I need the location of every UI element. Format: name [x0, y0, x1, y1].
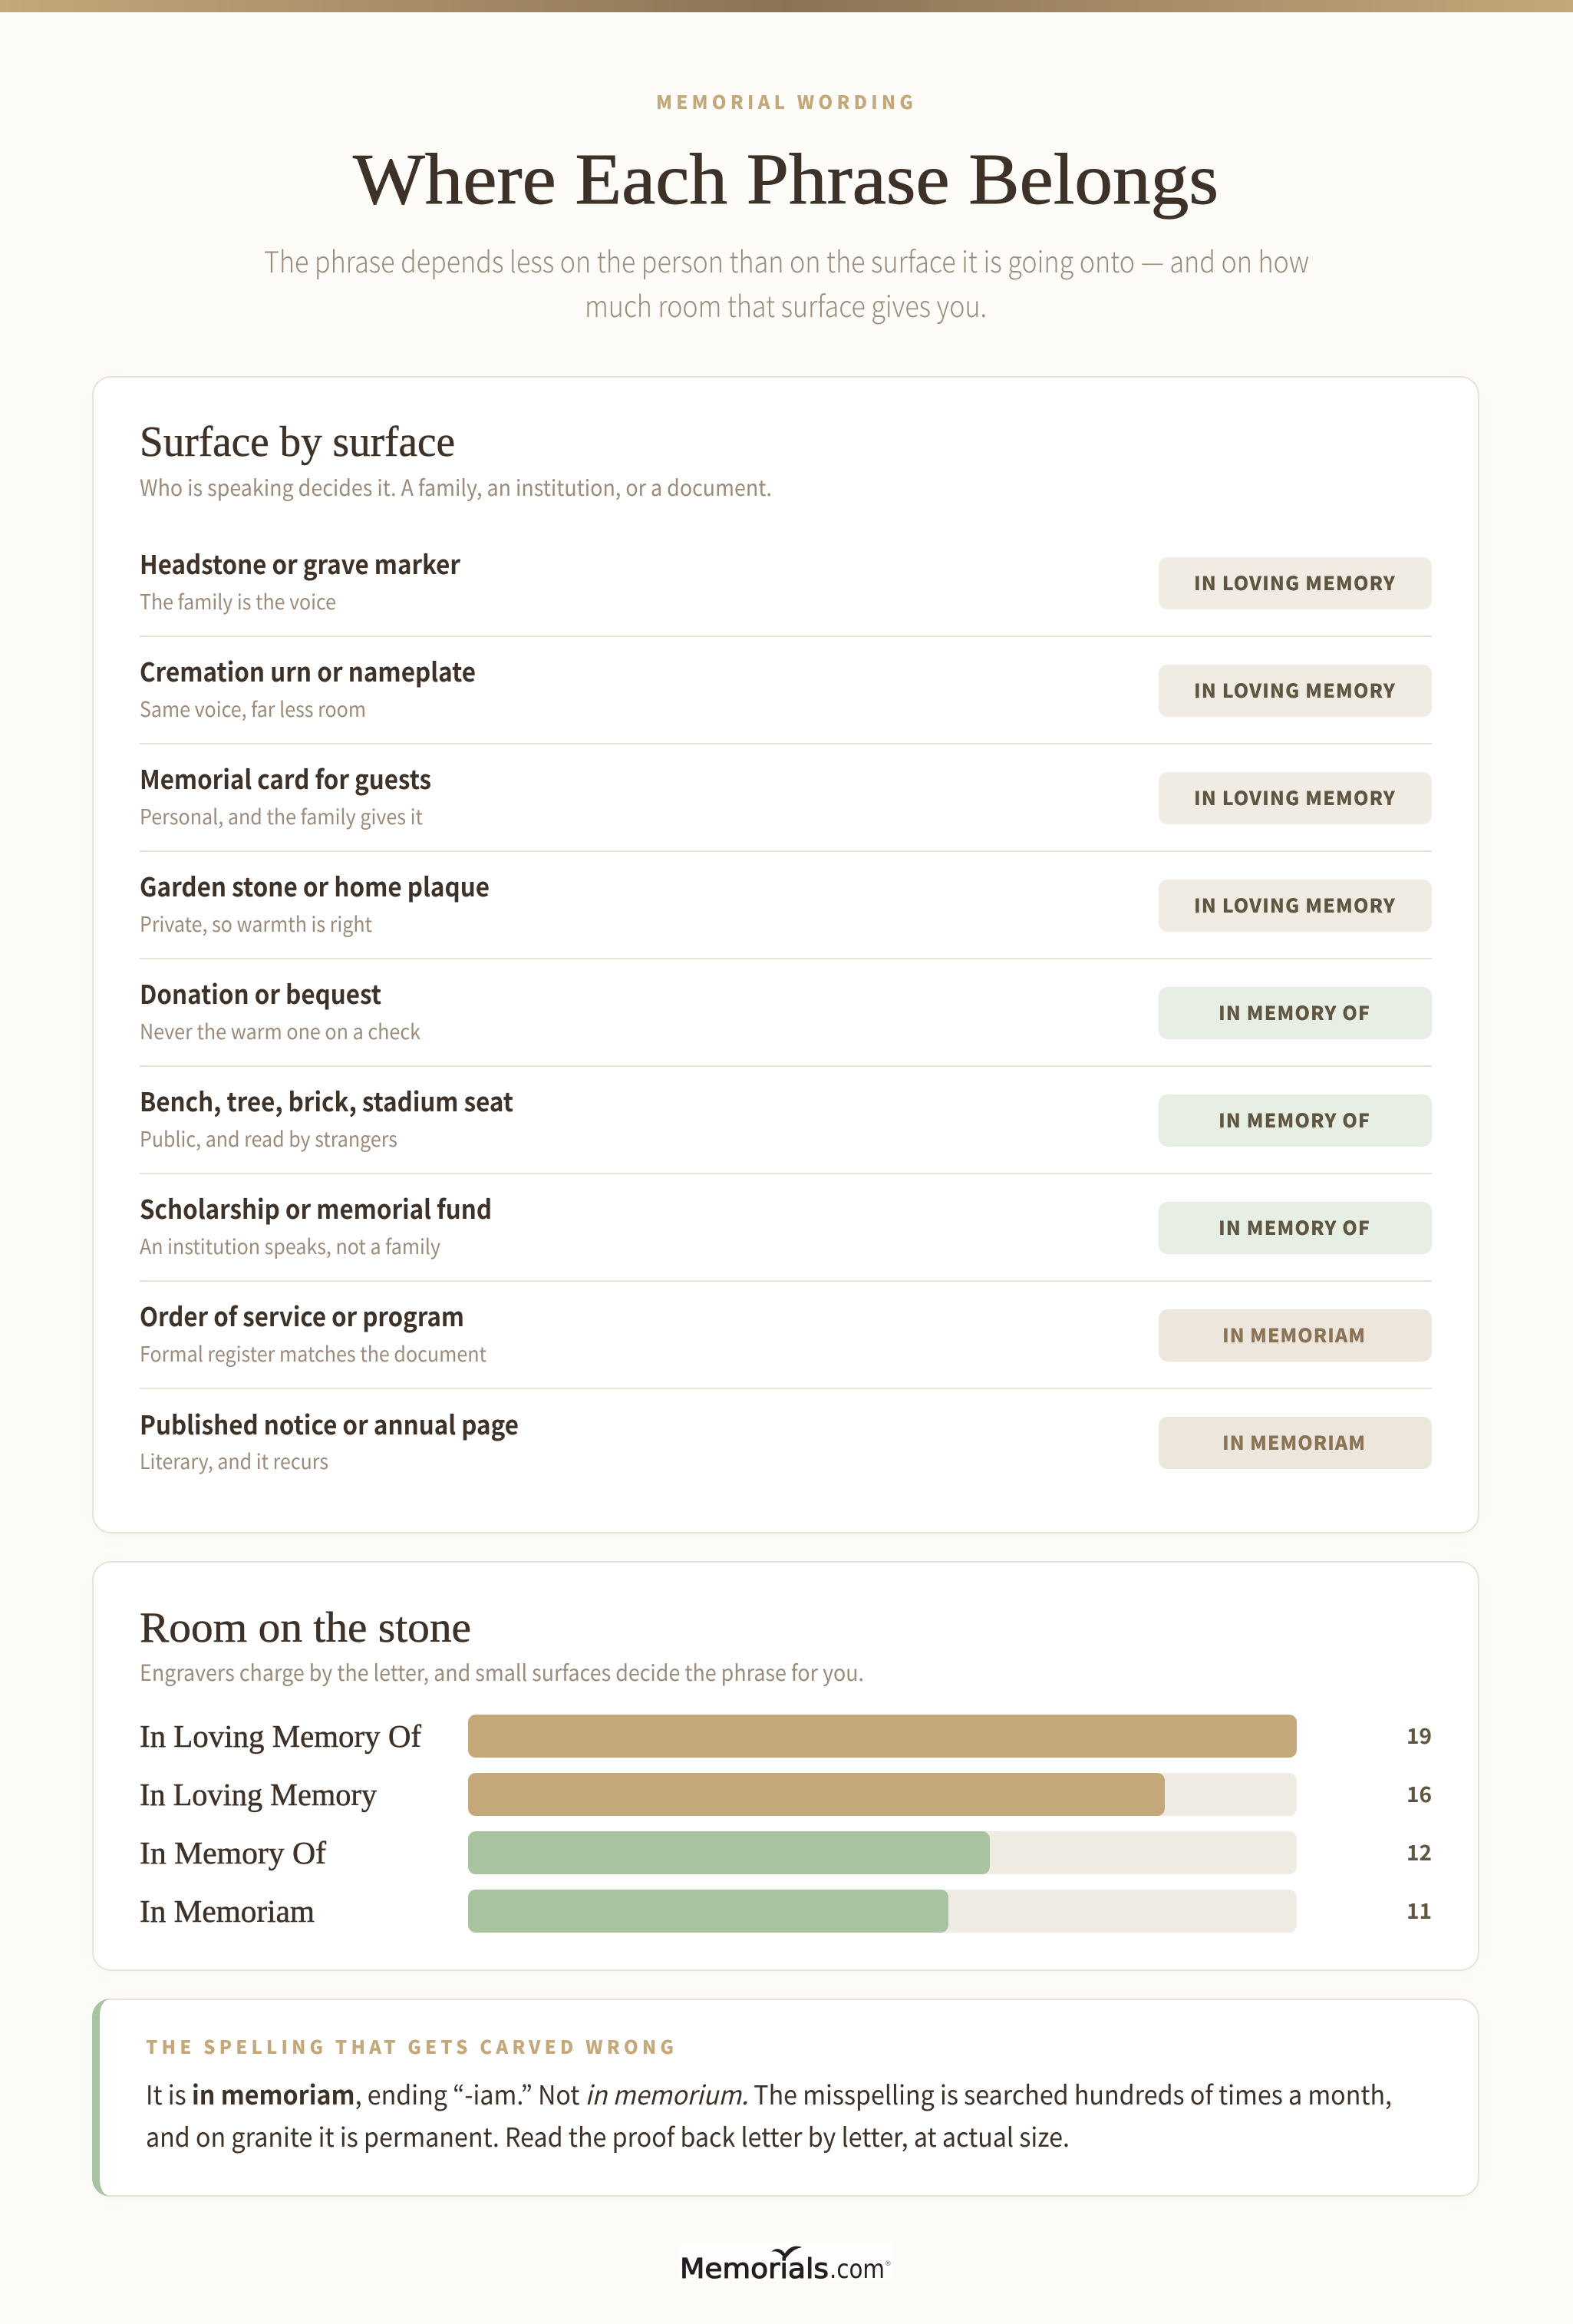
title: Where Each Phrase Belongs [353, 140, 1218, 220]
panel description: Engravers charge by the letter, and small surfaces decide the phrase for you. [140, 1656, 864, 1688]
row: memorial card: IN LOVING MEMORY [1194, 784, 1396, 811]
panel: room on the stone [93, 1562, 1479, 1970]
callout body: It is in memoriam, ending “-iam.” Not in memorium. The misspelling is searched hundreds of times a month, [146, 2075, 1392, 2112]
logo: Memorials.com: .com [829, 2254, 885, 2285]
callout body: and on granite it is permanent. Read the proof back letter by letter, at actual size. [146, 2117, 1070, 2154]
row: scholarship: Scholarship or memorial fund [140, 1189, 492, 1226]
row: garden stone: IN LOVING MEMORY [1194, 891, 1396, 919]
subtitle [264, 239, 1309, 325]
row: donation [140, 974, 1432, 1045]
row: garden stone: Garden stone or home plaque [140, 867, 490, 904]
panel: surface by surface [93, 377, 1479, 1533]
row: order of service: Formal register matches the document [140, 1338, 486, 1368]
callout body [146, 2075, 1392, 2154]
row: order of service: IN MEMORIAM [1222, 1321, 1365, 1349]
bar: In Loving Memory: In Loving Memory [140, 1777, 377, 1812]
callout label: THE SPELLING THAT GETS CARVED WRONG [146, 2032, 674, 2059]
row: memorial card [140, 759, 1432, 830]
bar: In Memoriam: 11 [1406, 1895, 1432, 1926]
callout: spelling [92, 1999, 1479, 2197]
panel heading: Room on the stone [140, 1604, 471, 1652]
row: order of service: Order of service or program [140, 1296, 464, 1334]
row: published notice [140, 1405, 1432, 1475]
bar: In Loving Memory Of: 19 [1406, 1720, 1432, 1751]
bar: In Memoriam: In Memoriam [140, 1893, 315, 1929]
row: bench [140, 1081, 1432, 1153]
bar chart [140, 1715, 1432, 1933]
row: cremation urn [140, 652, 1432, 723]
row: order of service [140, 1296, 1432, 1368]
row: scholarship [140, 1189, 1432, 1260]
bar: In Memory Of [140, 1831, 1432, 1874]
row: garden stone: Private, so warmth is right [140, 908, 372, 938]
bar: In Memoriam [140, 1890, 1432, 1933]
row: donation: Never the warm one on a check [140, 1015, 420, 1045]
row: memorial card: Memorial card for guests [140, 759, 431, 797]
row: donation: Donation or bequest [140, 974, 381, 1012]
row: bench: IN MEMORY OF [1218, 1106, 1370, 1134]
subtitle: much room that surface gives you. [585, 283, 987, 325]
row: cremation urn: IN LOVING MEMORY [1194, 676, 1396, 704]
row: scholarship: IN MEMORY OF [1218, 1213, 1370, 1241]
row: headstone [140, 544, 1432, 616]
row: garden stone [140, 867, 1432, 938]
logo: Memorials.com: ® [885, 2260, 891, 2267]
bar: In Loving Memory Of: In Loving Memory Of [140, 1718, 421, 1754]
row: headstone: The family is the voice [140, 586, 336, 616]
row: published notice: Literary, and it recurs [140, 1445, 328, 1475]
bar: In Loving Memory: 16 [1406, 1778, 1432, 1809]
row: headstone: IN LOVING MEMORY [1194, 569, 1396, 596]
row: published notice: IN MEMORIAM [1222, 1428, 1365, 1456]
bar: In Loving Memory [140, 1773, 1432, 1816]
row: cremation urn: Cremation urn or nameplate [140, 652, 476, 689]
top gradient bar [0, 0, 1573, 12]
eyebrow: MEMORIAL WORDING [656, 87, 913, 114]
row: scholarship: An institution speaks, not a family [140, 1230, 440, 1260]
row: published notice: Published notice or annual page [140, 1405, 519, 1442]
row: cremation urn: Same voice, far less room [140, 693, 366, 723]
row: headstone: Headstone or grave marker [140, 544, 460, 582]
logo: Memorials.com: Memorials [680, 2253, 829, 2285]
row: memorial card: Personal, and the family gives it [140, 801, 423, 830]
panel description: Who is speaking decides it. A family, an institution, or a document. [140, 470, 772, 503]
subtitle: The phrase depends less on the person than on the surface it is going onto — and on how [264, 239, 1309, 281]
panel heading: Surface by surface [140, 418, 455, 466]
row: bench: Public, and read by strangers [140, 1123, 397, 1153]
row: bench: Bench, tree, brick, stadium seat [140, 1081, 513, 1119]
bar: In Memory Of: In Memory Of [140, 1835, 326, 1870]
bar: In Loving Memory Of [140, 1715, 1432, 1758]
bar: In Memory Of: 12 [1406, 1837, 1432, 1867]
row: donation: IN MEMORY OF [1218, 999, 1370, 1026]
logo: Memorials.com [678, 2243, 893, 2285]
